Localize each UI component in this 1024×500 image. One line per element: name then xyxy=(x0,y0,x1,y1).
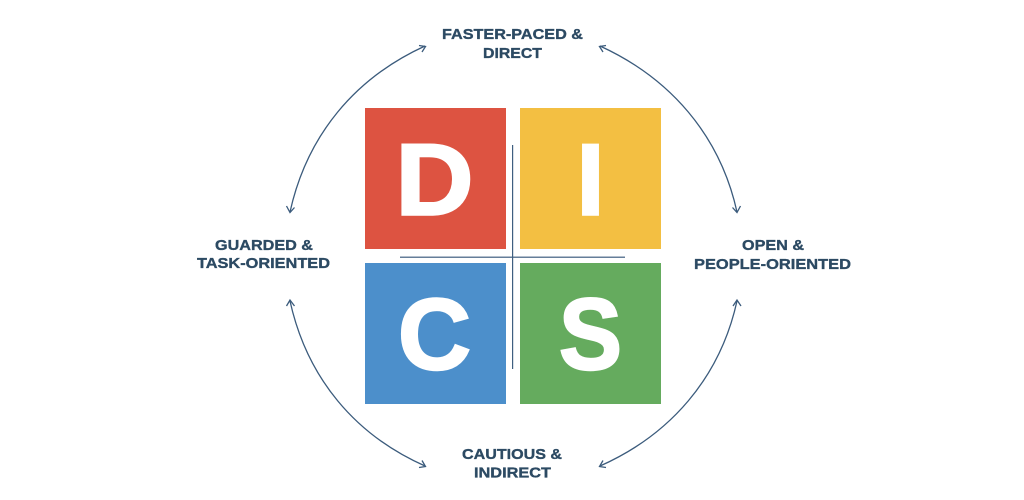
label: guarded and task-oriented: TASK-ORIENTED xyxy=(197,255,330,272)
panel: S quadrant xyxy=(520,263,661,404)
panel: S quadrant: S xyxy=(559,279,622,391)
arrow: bottom-left arc xyxy=(286,300,426,468)
label: guarded and task-oriented: GUARDED & xyxy=(215,237,313,254)
arrow: top-right arc xyxy=(600,46,740,212)
label: cautious and indirect xyxy=(462,446,562,482)
label: cautious and indirect: CAUTIOUS & xyxy=(462,446,562,463)
panel: C quadrant: C xyxy=(398,279,471,391)
label: faster-paced and direct: DIRECT xyxy=(483,45,542,62)
arrow: bottom-right arc xyxy=(600,300,741,468)
panel: I quadrant xyxy=(520,108,661,249)
label: guarded and task-oriented xyxy=(197,237,330,272)
panel: D quadrant xyxy=(365,108,506,249)
label: faster-paced and direct xyxy=(442,26,583,62)
vertical axis xyxy=(512,145,513,369)
panel: D quadrant: D xyxy=(396,124,474,236)
label: open and people-oriented: OPEN & xyxy=(742,237,804,254)
panel: I quadrant: I xyxy=(576,124,604,236)
label: cautious and indirect: INDIRECT xyxy=(474,464,551,482)
horizontal axis xyxy=(400,257,625,258)
arrow: top-left arc xyxy=(286,46,426,212)
label: faster-paced and direct: FASTER-PACED & xyxy=(442,26,583,43)
panel: C quadrant xyxy=(365,263,506,404)
label: open and people-oriented: PEOPLE-ORIENTED xyxy=(694,256,851,273)
label: open and people-oriented xyxy=(694,237,851,273)
